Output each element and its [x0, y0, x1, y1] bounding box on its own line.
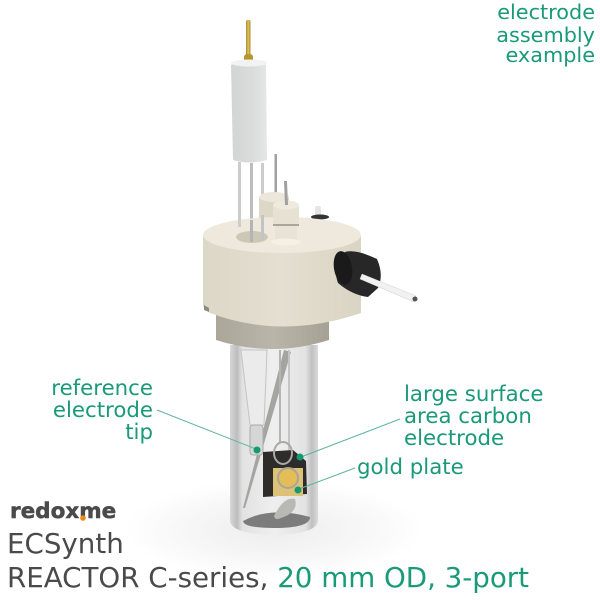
- callout: gold plate: [294, 455, 464, 494]
- floor reflection: [124, 480, 424, 580]
- callout: reference electrode tip: reference: [51, 376, 153, 401]
- callout: electrode assembly example: electrode: [497, 0, 595, 24]
- collar: [216, 315, 329, 349]
- reactor tube: [230, 345, 318, 535]
- callout: gold plate: gold plate: [357, 455, 464, 480]
- reactor assembly illustration: [203, 20, 418, 535]
- callout: electrode assembly example: example: [505, 43, 595, 67]
- white side tube: [360, 274, 418, 302]
- gold pin: [244, 20, 253, 63]
- callout: large surface area carbon electrode: large surface: [404, 382, 543, 407]
- rods inside opening: [238, 215, 264, 242]
- product subtitle: REACTOR C-series, 20 mm OD, 3-port: [7, 561, 529, 594]
- cap body: [203, 217, 361, 326]
- callout: reference electrode tip: [51, 376, 260, 454]
- diagonal glass rod: [243, 350, 291, 508]
- callout: large surface area carbon electrode: [296, 382, 543, 460]
- logo: redoxme: redoxme: [10, 499, 116, 524]
- callout: reference electrode tip: tip: [125, 420, 153, 445]
- back port fitting: [259, 192, 289, 235]
- carbon electrode with gold plate: [263, 442, 307, 497]
- callout: electrode assembly example: assembly: [496, 23, 595, 47]
- white electrode holder: [231, 60, 267, 162]
- glass rods and thin electrode wires: [238, 154, 277, 238]
- callout: electrode assembly example: [496, 0, 595, 67]
- cap port opening: [236, 231, 268, 243]
- small rear vent: [311, 206, 329, 220]
- callout: large surface area carbon electrode: electrode: [404, 426, 504, 451]
- callout: reference electrode tip: electrode: [53, 398, 153, 423]
- callout: large surface area carbon electrode: area carbon: [404, 404, 532, 429]
- electrode wires: [279, 350, 290, 468]
- reference electrode capillary: [241, 350, 267, 455]
- product title: ECSynth: [7, 527, 124, 560]
- black side fitting: [331, 250, 381, 297]
- front port fitting: [271, 181, 301, 246]
